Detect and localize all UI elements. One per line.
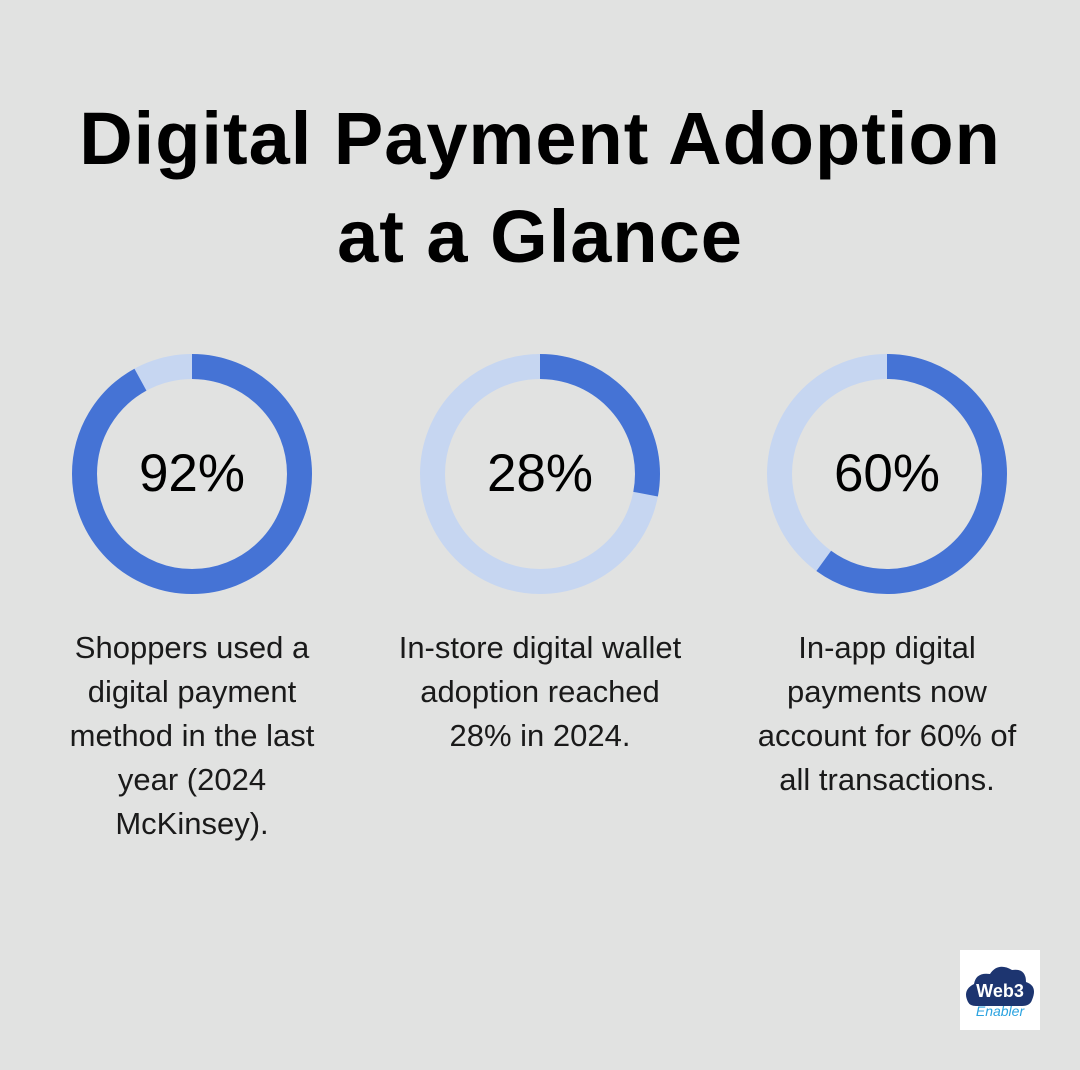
title: Digital Payment Adoption — [79, 97, 1001, 180]
caption 1: digital payment — [88, 674, 296, 709]
caption 1: year (2024 — [118, 762, 266, 797]
caption 3 — [758, 630, 1016, 797]
caption 2: adoption reached — [420, 674, 660, 709]
donut: 60%: 60% — [834, 444, 940, 503]
caption 1: Shoppers used a — [75, 630, 309, 665]
logo — [960, 950, 1040, 1030]
caption 1: McKinsey). — [115, 806, 269, 841]
caption 2: In-store digital wallet — [399, 630, 681, 665]
caption 3: all transactions. — [779, 762, 995, 797]
caption 3: account for 60% of — [758, 718, 1016, 753]
donut: 60% — [767, 354, 1007, 594]
title: at a Glance — [337, 195, 743, 278]
logo: Enabler — [976, 1003, 1025, 1019]
caption 3: In-app digital — [798, 630, 976, 665]
logo: Web3 — [976, 981, 1024, 1001]
donut: 28% — [420, 354, 660, 594]
donut: 92% — [72, 354, 312, 594]
donut: 92%: 92% — [139, 444, 245, 503]
caption 3: payments now — [787, 674, 987, 709]
caption 2 — [399, 630, 681, 753]
caption 2: 28% in 2024. — [450, 718, 630, 753]
caption 1: method in the last — [70, 718, 314, 753]
donut: 28%: 28% — [487, 444, 593, 503]
caption 1 — [70, 630, 314, 841]
title — [79, 97, 1001, 278]
